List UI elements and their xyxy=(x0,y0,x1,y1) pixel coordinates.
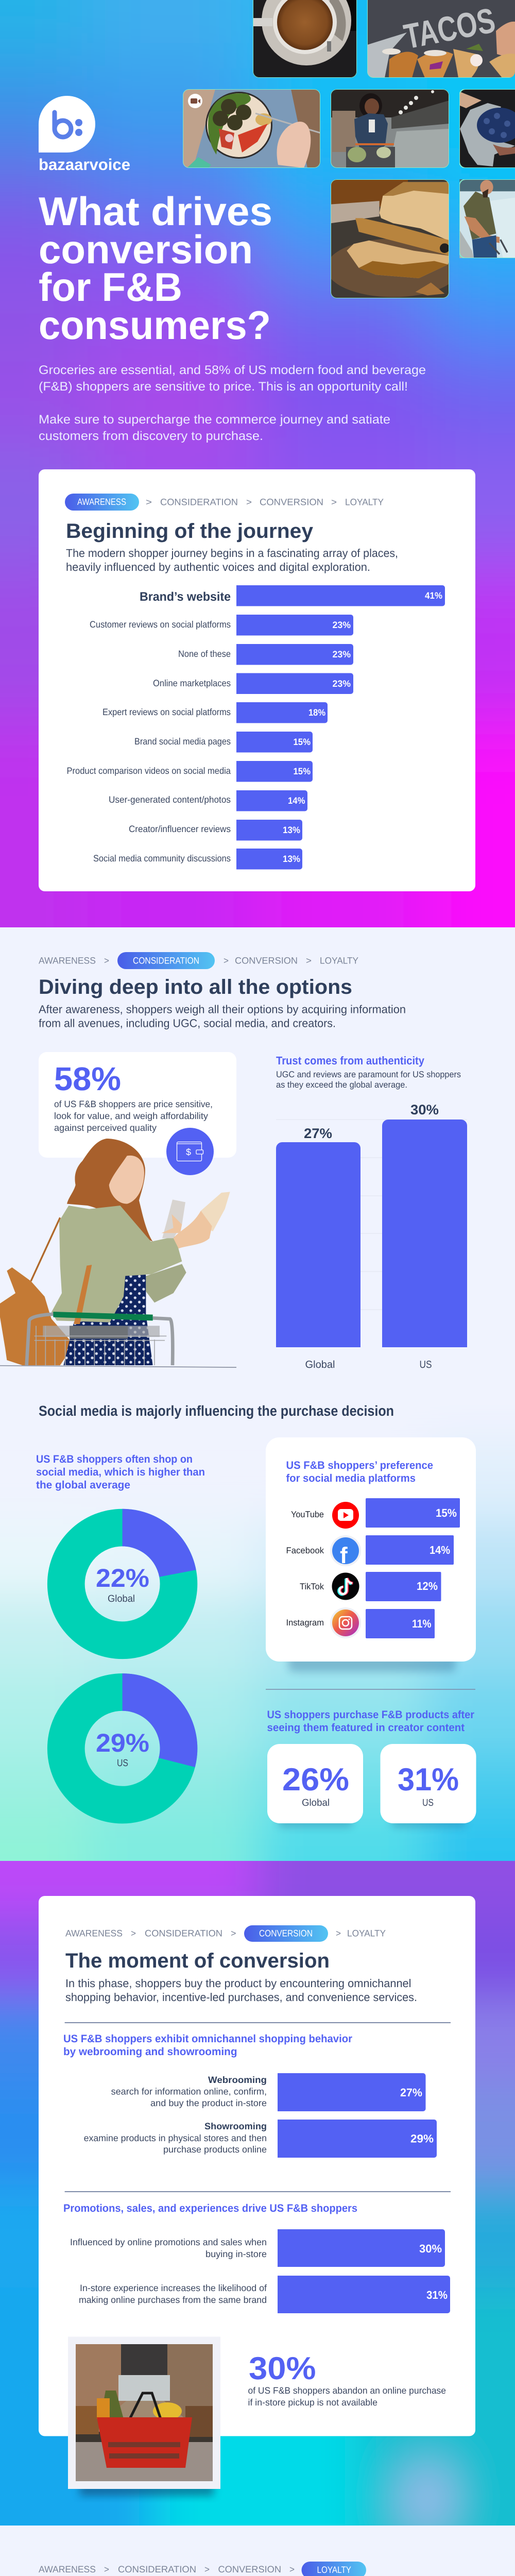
journey steps: conversion active: > xyxy=(336,1928,341,1938)
journey steps: awareness active: AWARENESS xyxy=(77,497,126,507)
description: The modern shopper journey begins in a fascinating array of places, xyxy=(66,547,398,560)
heading: The moment of conversion xyxy=(65,1950,330,1972)
icon: video badge xyxy=(188,94,202,108)
bar chart: where the journey begins: 13% xyxy=(283,825,300,835)
journey steps: awareness active: CONSIDERATION xyxy=(160,497,238,507)
journey steps: awareness active: LOYALTY xyxy=(345,497,384,507)
logo: bazaarvoice speech bubble xyxy=(39,96,95,152)
section: conversion xyxy=(0,1700,515,2576)
bar chart: where the journey begins: Social media community discussions xyxy=(93,853,231,863)
journey steps: loyalty active: > xyxy=(104,2564,109,2574)
text: omnichannel heading: by webrooming and showrooming xyxy=(63,2046,237,2058)
journey steps: consideration active: LOYALTY xyxy=(320,956,358,966)
photo: sliced bread xyxy=(331,179,449,298)
journey steps: conversion active: CONSIDERATION xyxy=(145,1928,222,1938)
bar chart: promotions and in-store: 31% xyxy=(426,2289,448,2301)
intro text xyxy=(39,363,426,443)
journey steps: conversion active: > xyxy=(231,1928,236,1938)
bar chart: webrooming and showrooming: Showrooming xyxy=(204,2121,267,2131)
bar chart: webrooming and showrooming: search for information online, confirm, xyxy=(111,2087,267,2097)
text: omnichannel heading: US F&B shoppers exhibit omnichannel shopping behavior xyxy=(63,2033,352,2045)
text: trust comes from authenticity xyxy=(276,1054,461,1090)
bar chart: where the journey begins: Expert reviews on social platforms xyxy=(102,707,231,717)
journey steps: loyalty active: AWARENESS xyxy=(39,2564,96,2574)
journey steps: loyalty active: > xyxy=(289,2564,295,2574)
photo: blueberries xyxy=(459,89,515,168)
title: conversion xyxy=(39,227,253,272)
journey steps: awareness active xyxy=(65,494,384,511)
text: trust comes from authenticity: Trust comes from authenticity xyxy=(276,1054,425,1067)
bar chart: where the journey begins xyxy=(67,585,445,870)
description xyxy=(66,547,398,573)
text: trust comes from authenticity: as they exceed the global average. xyxy=(276,1080,407,1090)
description: In this phase, shoppers buy the product by encountering omnichannel xyxy=(65,1977,411,1990)
journey steps: conversion active: CONVERSION xyxy=(259,1928,313,1938)
journey steps: awareness active: > xyxy=(146,497,152,507)
bar chart: where the journey begins: 15% xyxy=(294,737,311,747)
intro text: (F&B) shoppers are sensitive to price. This is an opportunity call! xyxy=(39,380,408,394)
bar chart: trust global vs US: 27% xyxy=(304,1126,332,1141)
loyalty gradient background xyxy=(0,2526,515,2576)
journey steps: loyalty active xyxy=(39,2562,366,2576)
journey steps: consideration active: CONSIDERATION xyxy=(133,956,199,966)
section: loyalty xyxy=(0,2526,515,2576)
journey steps: loyalty active: CONSIDERATION xyxy=(118,2564,196,2574)
description xyxy=(39,1003,406,1029)
photo: grocery basket in aisle xyxy=(68,2337,220,2496)
bar chart: trust global vs US: 30% xyxy=(410,1102,439,1117)
bar chart: promotions and in-store: 30% xyxy=(419,2242,442,2255)
text: omnichannel heading xyxy=(63,2033,352,2058)
bar chart: where the journey begins: 14% xyxy=(288,795,305,806)
icon: Instagram xyxy=(330,1607,361,1638)
journey steps: consideration active: AWARENESS xyxy=(39,956,96,966)
bar chart: where the journey begins: 13% xyxy=(283,854,300,864)
card: 58% price sensitive: against perceived quality xyxy=(54,1123,157,1133)
panel: moment of conversion xyxy=(39,1896,475,2436)
journey steps: conversion active: > xyxy=(131,1928,136,1938)
bar chart: webrooming and showrooming: 27% xyxy=(400,2086,422,2099)
card heading: US F&B shoppers’ preference xyxy=(286,1460,433,1471)
card: platform preference xyxy=(266,1437,476,1672)
stat card: global 26%: 26% xyxy=(282,1762,349,1798)
stat card: global 26% xyxy=(267,1744,363,1827)
description: shopping behavior, incentive-led purchases, and convenience services. xyxy=(65,1991,417,2004)
icon: wallet xyxy=(166,1128,214,1175)
intro text: Make sure to supercharge the commerce journey and satiate xyxy=(39,413,390,427)
stat: 30% abandon: 30% xyxy=(249,2351,316,2386)
bar chart: promotions and in-store: Influenced by online promotions and sales when xyxy=(70,2237,267,2247)
intro text: Groceries are essential, and 58% of US modern food and beverage xyxy=(39,363,426,377)
journey steps: conversion active: LOYALTY xyxy=(347,1928,386,1938)
journey steps: awareness active: > xyxy=(246,497,252,507)
platform bars: Facebook xyxy=(286,1546,324,1555)
heading: Beginning of the journey xyxy=(66,520,314,543)
intro text: customers from discovery to purchase. xyxy=(39,429,263,443)
journey steps: loyalty active: CONVERSION xyxy=(218,2564,281,2574)
section: hero and awareness xyxy=(0,0,515,927)
bar chart: promotions and in-store: buying in-store xyxy=(205,2249,267,2259)
consideration gradient background xyxy=(0,927,515,2020)
icon: Facebook xyxy=(330,1535,361,1568)
donut chart: global 22% xyxy=(66,1528,179,1640)
card heading: for social media platforms xyxy=(286,1472,416,1484)
bar chart: promotions and in-store: making online purchases from the same brand xyxy=(79,2295,267,2305)
platform bars: TikTok xyxy=(300,1582,324,1591)
journey steps: consideration active: > xyxy=(306,956,312,966)
stat card: US 31%: US xyxy=(422,1798,434,1808)
journey steps: consideration active: > xyxy=(224,956,229,966)
photo: tacos t-shirt xyxy=(367,0,515,78)
stat card: US 31%: 31% xyxy=(398,1762,459,1798)
bar chart: where the journey begins: 41% xyxy=(425,590,442,601)
icon: wallet: $ xyxy=(186,1147,191,1157)
heading: Diving deep into all the options xyxy=(39,976,352,998)
bar chart: promotions and in-store xyxy=(70,2229,450,2313)
bar chart: webrooming and showrooming: examine products in physical stores and then xyxy=(84,2133,267,2143)
icon: TikTok xyxy=(332,1572,359,1600)
bar chart: where the journey begins: Brand social media pages xyxy=(134,736,231,747)
bar chart: webrooming and showrooming: purchase products online xyxy=(163,2144,267,2155)
section: consideration xyxy=(0,927,515,2020)
bar chart: where the journey begins: User-generated content/photos xyxy=(109,794,231,805)
bar chart: where the journey begins: Online marketplaces xyxy=(153,678,231,688)
platform bars: 12% xyxy=(417,1580,438,1592)
journey steps: awareness active: CONVERSION xyxy=(260,497,323,507)
card: 58% price sensitive xyxy=(39,1052,236,1158)
bar chart: webrooming and showrooming: 29% xyxy=(410,2132,434,2145)
text: trust comes from authenticity: UGC and reviews are paramount for US shoppers xyxy=(276,1070,461,1079)
logo wordmark: bazaarvoice xyxy=(39,156,130,174)
journey steps: consideration active: > xyxy=(104,956,109,966)
text: creator content xyxy=(267,1709,474,1734)
text: US shoppers on social xyxy=(36,1453,205,1491)
donut chart: US 29%: 29% xyxy=(96,1728,149,1757)
platform bars: 15% xyxy=(436,1506,457,1519)
text: creator content: seeing them featured in creator content xyxy=(267,1722,465,1734)
bar chart: webrooming and showrooming: and buy the product in-store xyxy=(150,2098,267,2108)
donut chart: global 22%: 22% xyxy=(96,1564,149,1592)
stat card: US 31% xyxy=(380,1744,476,1827)
journey steps: awareness active: > xyxy=(331,497,337,507)
text: US shoppers on social: social media, which is higher than xyxy=(36,1466,205,1478)
bar chart: trust global vs US: US xyxy=(419,1359,432,1370)
journey steps: consideration active: CONVERSION xyxy=(235,956,298,966)
description xyxy=(65,1977,417,2004)
bar chart: trust global vs US xyxy=(276,1102,467,1370)
stat: 30% abandon: of US F&B shoppers abandon an online purchase xyxy=(248,2385,446,2396)
bar chart: where the journey begins: Customer reviews on social platforms xyxy=(90,619,231,630)
icon: YouTube xyxy=(332,1502,359,1529)
card heading xyxy=(286,1460,433,1484)
title: for F&B xyxy=(39,264,182,310)
bar chart: where the journey begins: Brand’s website xyxy=(140,590,231,604)
stat: 30% abandon xyxy=(248,2351,446,2408)
bar chart: where the journey begins: 15% xyxy=(294,766,311,776)
donut chart: US 29%: US xyxy=(117,1758,128,1769)
journey steps: loyalty active: > xyxy=(204,2564,210,2574)
title: consumers? xyxy=(39,302,271,348)
heading: social media: Social media is majorly influencing the purchase decision xyxy=(39,1403,394,1419)
description: After awareness, shoppers weigh all their options by acquiring information xyxy=(39,1003,406,1016)
icon: Facebook: f xyxy=(340,1543,348,1568)
bar chart: promotions and in-store: In-store experience increases the likelihood of xyxy=(80,2283,267,2293)
description: from all avenues, including UGC, social media, and creators. xyxy=(39,1017,336,1029)
photo: woman shopper with cart xyxy=(0,1139,236,1367)
bar chart: trust global vs US: Global xyxy=(305,1359,335,1370)
title xyxy=(39,189,272,348)
journey steps: consideration active xyxy=(39,952,358,969)
stat: 30% abandon: if in-store pickup is not available xyxy=(248,2397,377,2408)
journey steps: loyalty active: LOYALTY xyxy=(317,2565,351,2575)
journey steps: conversion active: AWARENESS xyxy=(65,1928,123,1938)
text: creator content: US shoppers purchase F&B products after xyxy=(267,1709,474,1721)
card: 58% price sensitive: look for value, and weigh affordability xyxy=(54,1111,208,1121)
hero gradient background xyxy=(0,0,515,927)
bar chart: where the journey begins: 23% xyxy=(333,649,351,659)
description: heavily influenced by authentic voices and digital exploration. xyxy=(66,561,370,573)
bar chart: webrooming and showrooming xyxy=(84,2073,437,2158)
text: promotions heading: Promotions, sales, and experiences drive US F&B shoppers xyxy=(63,2202,357,2214)
platform bars: 14% xyxy=(430,1544,450,1556)
bar chart: where the journey begins: None of these xyxy=(178,649,231,659)
bar chart: where the journey begins: Creator/influencer reviews xyxy=(129,824,231,834)
stat card: global 26%: Global xyxy=(302,1798,330,1808)
bar chart: where the journey begins: Product comparison videos on social media xyxy=(67,766,231,776)
text: US shoppers on social: US F&B shoppers often shop on xyxy=(36,1453,193,1465)
bar chart: webrooming and showrooming: Webrooming xyxy=(208,2075,267,2085)
card: 58% price sensitive: of US F&B shoppers are price sensitive, xyxy=(54,1099,213,1109)
photo: food bowl xyxy=(183,89,320,168)
card: 58% price sensitive: 58% xyxy=(54,1060,121,1097)
bar chart: where the journey begins: 23% xyxy=(333,679,351,689)
platform bars xyxy=(286,1498,460,1638)
platform bars: YouTube xyxy=(291,1510,324,1519)
photo: man in dairy aisle xyxy=(459,179,515,258)
platform bars: 11% xyxy=(412,1617,432,1630)
bar chart: where the journey begins: 18% xyxy=(308,707,325,718)
bar chart: where the journey begins: 23% xyxy=(333,620,351,630)
photo: woman in store xyxy=(331,89,449,168)
photo: coffee cup xyxy=(253,0,357,78)
conversion gradient background xyxy=(0,1700,515,2576)
panel: awareness xyxy=(39,469,475,891)
text: US shoppers on social: the global average xyxy=(36,1479,130,1491)
journey steps: conversion active xyxy=(65,1925,386,1942)
donut chart: US 29% xyxy=(66,1692,179,1805)
platform bars: Instagram xyxy=(286,1618,324,1628)
donut chart: global 22%: Global xyxy=(108,1594,135,1604)
title: What drives xyxy=(39,189,272,234)
